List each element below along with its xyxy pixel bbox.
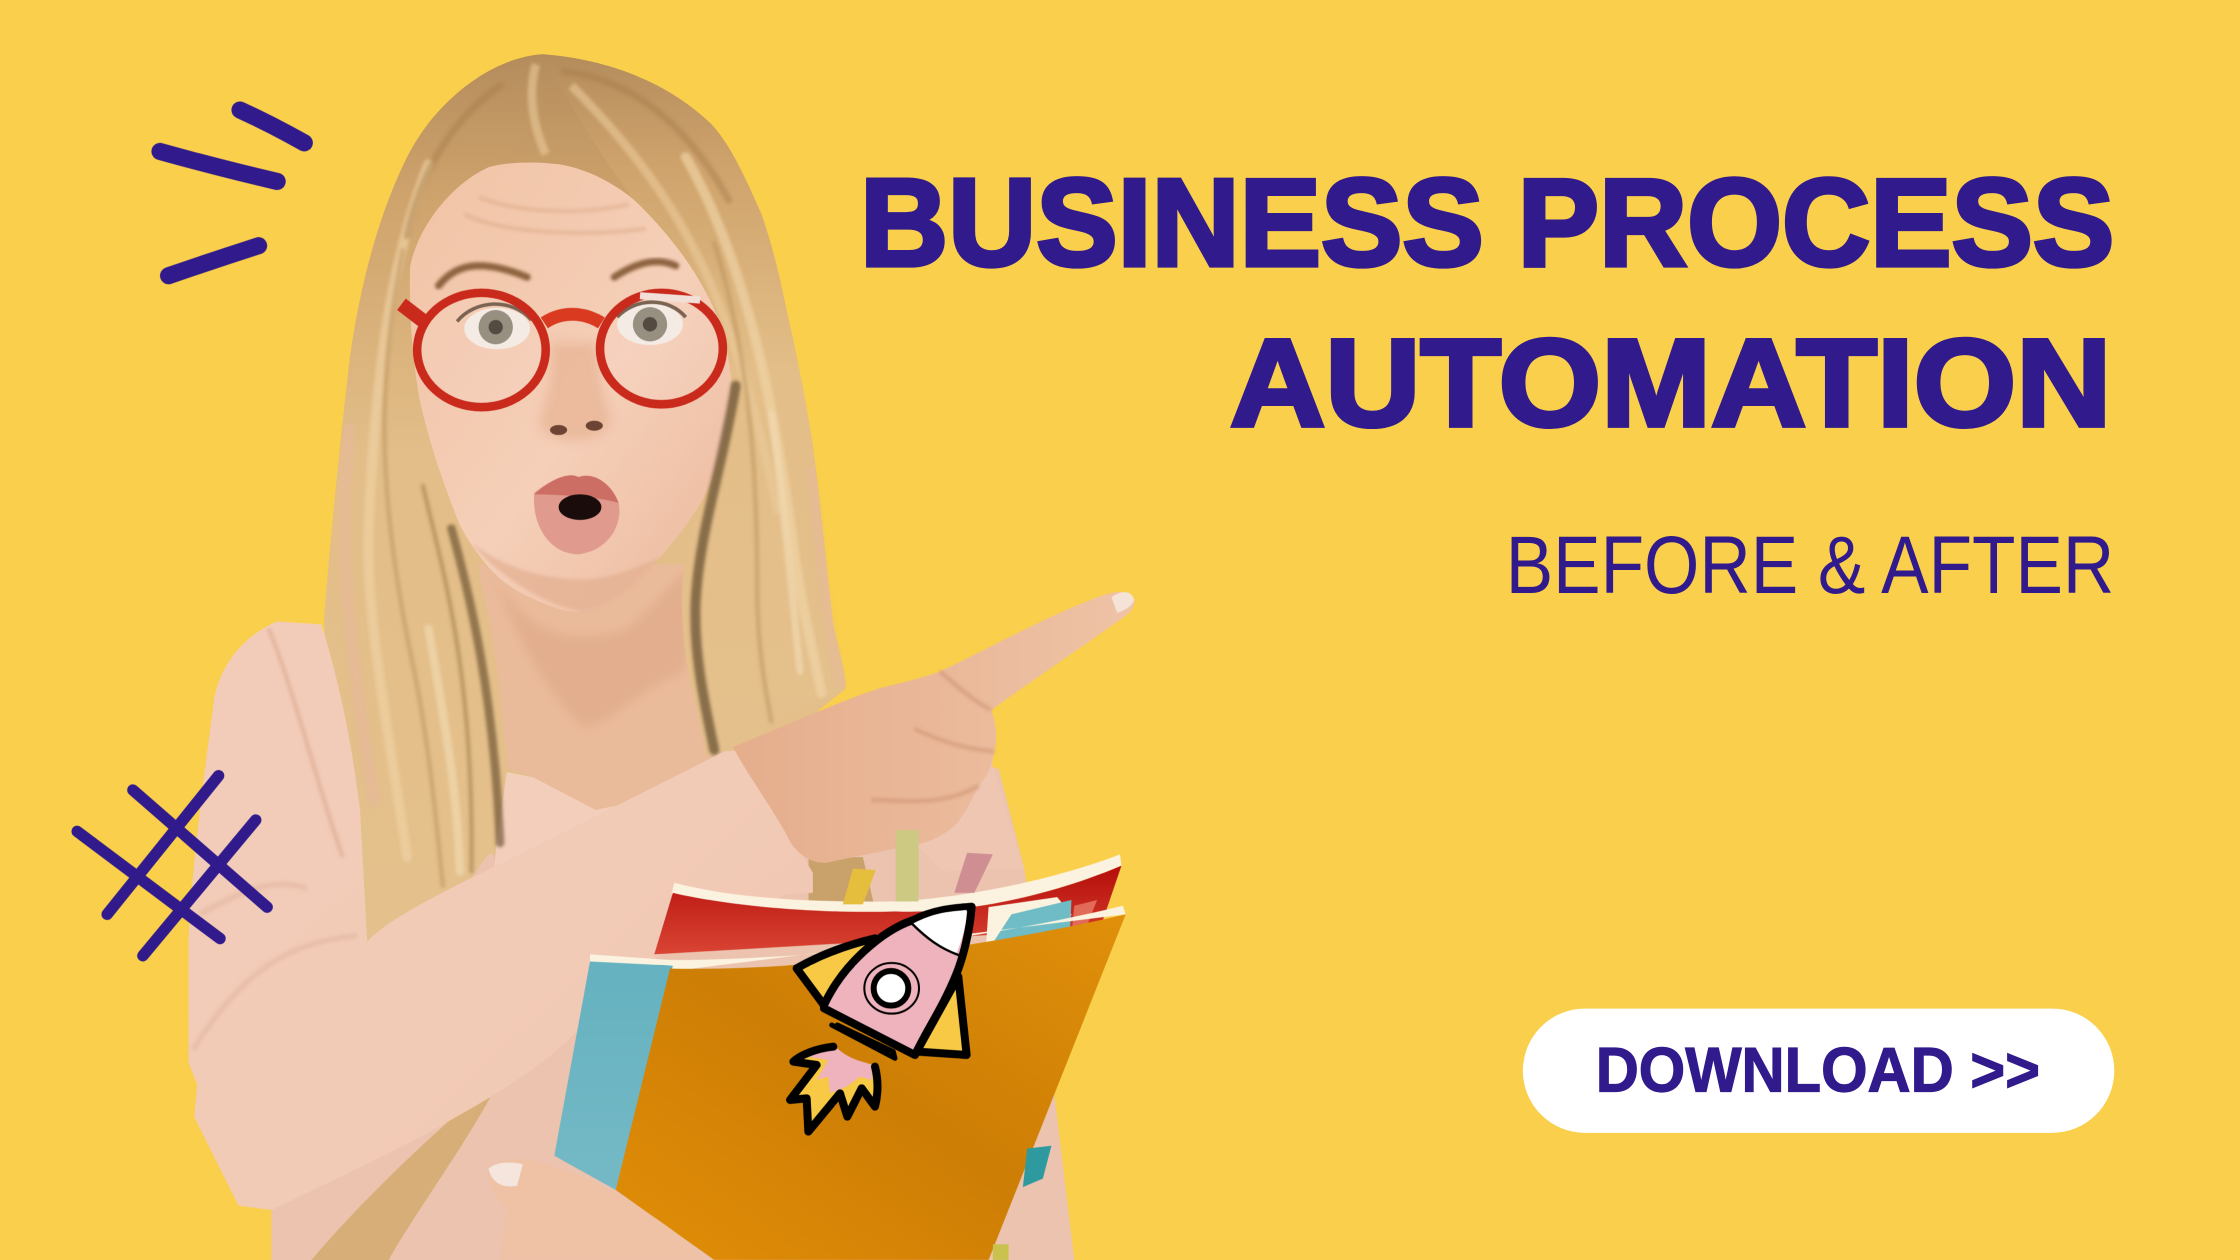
right eye <box>617 302 686 345</box>
neck and chest <box>479 564 724 810</box>
nose cone <box>913 910 967 953</box>
sweater neckline <box>493 771 616 914</box>
rocket body <box>824 907 972 1055</box>
red book cover <box>654 866 1121 954</box>
forehead shading <box>464 197 646 233</box>
red book pages <box>671 854 1121 912</box>
back green tab <box>993 1244 1009 1260</box>
flame <box>790 1047 877 1132</box>
hair strands <box>345 71 840 886</box>
hand creases <box>871 671 994 801</box>
button label: DOWNLOAD >> <box>1596 1035 2040 1105</box>
left eye <box>457 304 531 349</box>
orange book cover <box>616 914 1126 1260</box>
fingernail <box>1111 592 1134 613</box>
surprised mouth <box>534 475 619 554</box>
pointing hand <box>733 592 1134 863</box>
download button <box>1523 1009 2114 1133</box>
back teal tab <box>1023 1146 1051 1187</box>
decorative burst strokes <box>160 110 304 276</box>
face <box>410 163 731 612</box>
holding hand <box>488 1159 704 1260</box>
hair behind hand <box>809 857 874 906</box>
back hair <box>324 54 846 1000</box>
red glasses <box>401 293 723 407</box>
lower hair tip <box>311 1093 493 1260</box>
right fin <box>917 977 967 1055</box>
sleeve fold <box>193 884 357 1050</box>
subtitle: BEFORE & AFTER <box>1506 520 2114 611</box>
front hair left strand <box>324 54 544 943</box>
window <box>864 963 919 1014</box>
blue book spine <box>554 961 673 1190</box>
thumbnail <box>489 1163 523 1186</box>
far sleeve behind hand <box>914 743 1024 871</box>
eyebrows <box>439 262 676 286</box>
hair parting highlight <box>532 64 779 514</box>
bookmark: yellow <box>843 869 876 904</box>
woman with books <box>189 54 1134 1260</box>
cheek shadow <box>471 543 660 611</box>
title line 2: AUTOMATION <box>1230 314 2111 453</box>
orange book pages <box>590 906 1126 971</box>
bookmark: pink <box>954 853 993 893</box>
near arm sleeve <box>189 621 813 1210</box>
teal index tabs <box>986 897 1097 950</box>
title line 1: BUSINESS PROCESS <box>860 154 2114 293</box>
neck shadow <box>493 564 693 729</box>
base bar <box>832 1025 895 1058</box>
left fin <box>797 938 875 1007</box>
shoulder seam <box>269 629 343 857</box>
bookmark: green <box>896 830 919 901</box>
icon: rocket <box>790 907 972 1132</box>
decorative hash mark <box>77 776 267 956</box>
nose <box>540 343 611 440</box>
torso sweater <box>271 757 1074 1260</box>
front hair right strand <box>543 54 846 757</box>
